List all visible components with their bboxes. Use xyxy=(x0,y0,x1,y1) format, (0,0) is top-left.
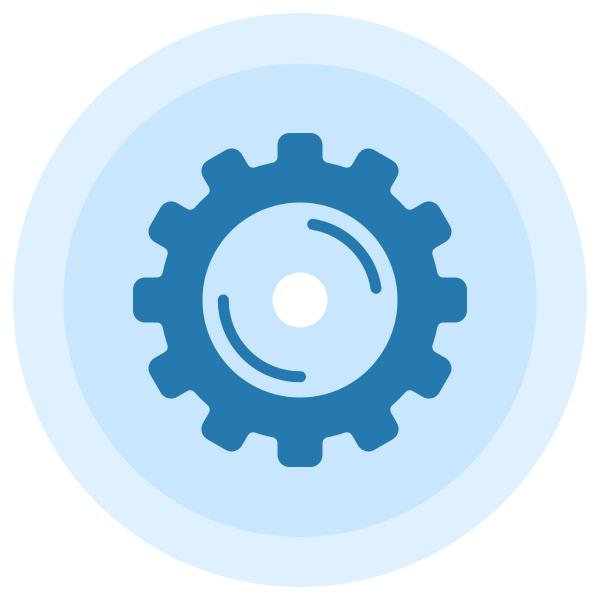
icon: gear xyxy=(133,133,467,467)
gear centre hole xyxy=(272,272,328,328)
highlight arc: lower left xyxy=(223,300,300,377)
inner background circle xyxy=(63,64,537,537)
gear inner disc xyxy=(202,202,398,398)
highlight arc: upper right xyxy=(313,224,376,288)
